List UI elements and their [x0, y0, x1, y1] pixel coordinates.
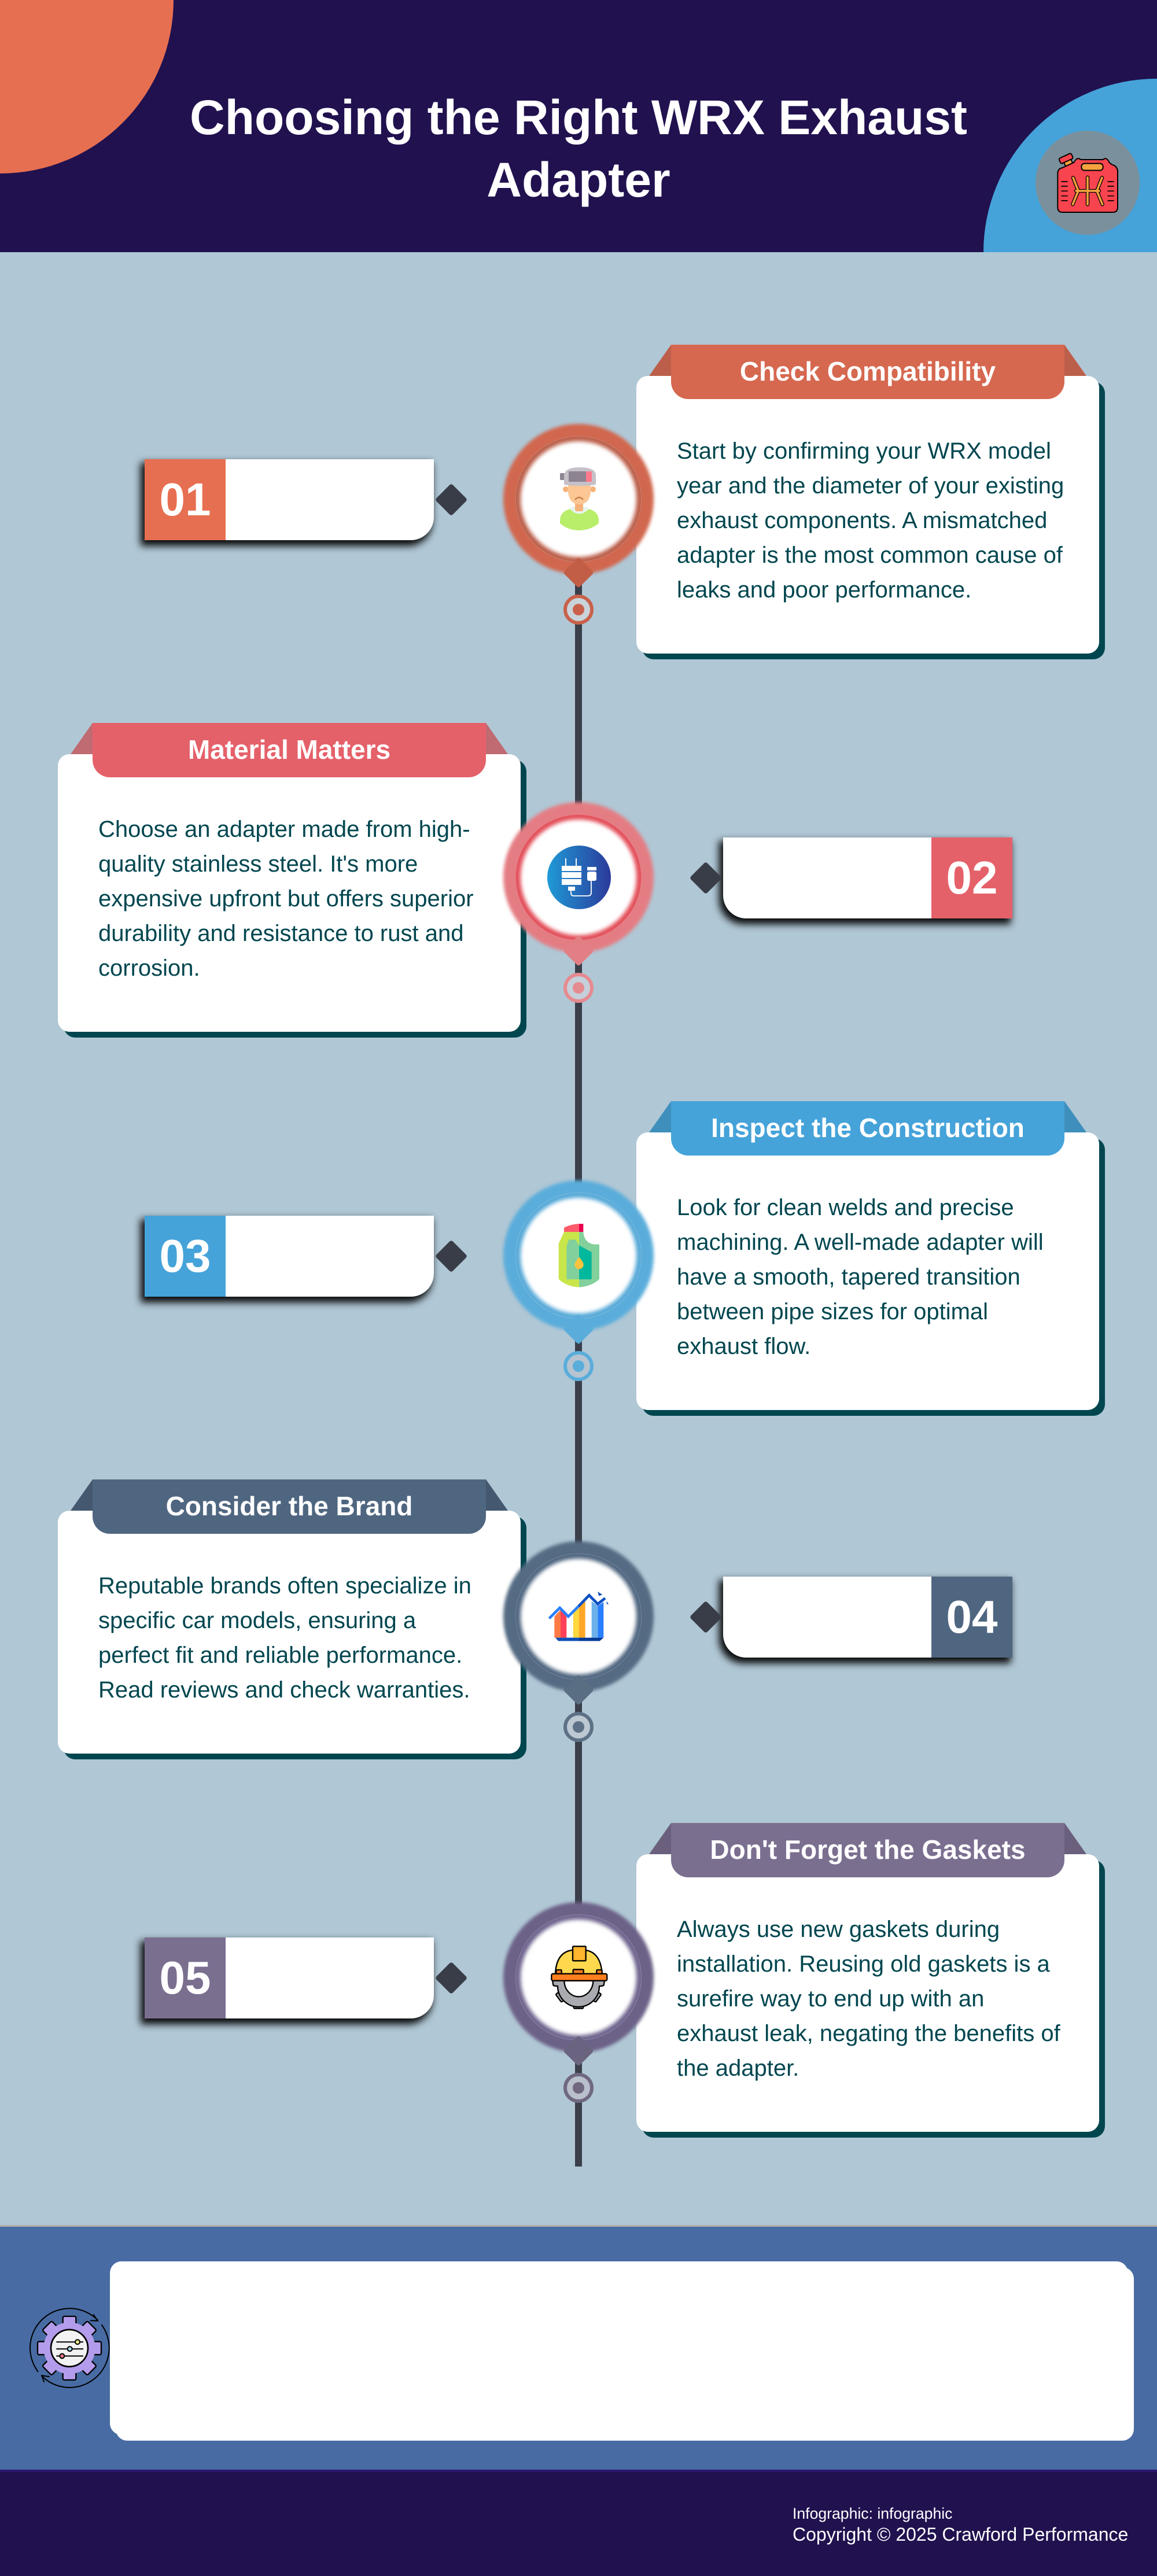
heading ribbon: Consider the Brand	[166, 1491, 412, 1521]
timeline node 1	[501, 421, 656, 625]
inner band	[515, 814, 642, 940]
panel: consider the brand	[58, 1479, 526, 1759]
description text: Read reviews and check warranties.	[98, 1677, 470, 1703]
icon: settings gear	[30, 2308, 110, 2389]
icon: oil bottle	[559, 1224, 599, 1287]
pointer diamond	[563, 935, 594, 966]
description text: installation. Reusing old gaskets is a	[677, 1951, 1050, 1977]
card body	[58, 1511, 521, 1754]
ribbon fold right	[1064, 1823, 1086, 1854]
decorative orange circle	[0, 0, 174, 174]
heading ribbon: Don't Forget the Gaskets	[710, 1835, 1026, 1865]
description text	[677, 1917, 1060, 2081]
source and copyright text	[793, 2505, 1128, 2545]
description text: Choose an adapter made from high-	[98, 817, 470, 842]
inner band	[515, 436, 642, 562]
number badge 01: 01	[160, 474, 211, 525]
panel: check compatibility	[636, 345, 1105, 659]
ribbon fold left	[649, 1101, 671, 1132]
icon: hard hat and gear	[551, 1946, 607, 2009]
number badge 03: 03	[160, 1230, 211, 1282]
card body	[58, 754, 521, 1032]
timeline spine	[575, 499, 582, 2167]
description text: specific car models, ensuring a	[98, 1608, 416, 1633]
panel: don't forget the gaskets	[636, 1823, 1105, 2138]
description text: Start by confirming your WRX model	[677, 438, 1051, 464]
heading ribbon: Check Compatibility	[740, 356, 996, 386]
number badge 01	[145, 459, 434, 540]
connector diamond 05	[435, 1962, 467, 1994]
description text: durability and resistance to rust and	[98, 921, 463, 946]
timeline node 3	[501, 1178, 656, 1381]
pointer diamond	[563, 557, 594, 588]
source and copyright text: Copyright © 2025 Crawford Performance	[793, 2524, 1128, 2545]
footer divider	[0, 2225, 1157, 2227]
summary box	[110, 2261, 1128, 2435]
number badge 03	[145, 1216, 434, 1297]
summary band	[0, 2227, 1157, 2470]
heading ribbon: Material Matters	[188, 735, 390, 765]
description text: year and the diameter of your existing	[677, 473, 1064, 499]
description text	[98, 817, 474, 981]
description text: leaks and poor performance.	[677, 577, 971, 603]
timeline dot	[563, 973, 594, 1003]
ribbon fold left	[71, 723, 93, 754]
description text: Always use new gaskets during	[677, 1917, 1000, 1942]
heading ribbon	[93, 723, 486, 777]
outer ring	[503, 424, 654, 574]
description text: quality stainless steel. It's more	[98, 851, 418, 877]
heading ribbon	[93, 1479, 486, 1534]
description text	[98, 1573, 471, 1703]
description text: the adapter.	[677, 2055, 799, 2081]
title: Adapter	[487, 153, 670, 207]
description text: perfect fit and reliable performance.	[98, 1643, 462, 1668]
description text: exhaust leak, negating the benefits of	[677, 2021, 1060, 2046]
timeline node 2	[501, 799, 656, 1003]
icon badge: grey disc	[1036, 131, 1140, 235]
timeline dot	[563, 595, 594, 625]
description text: Reputable brands often specialize in	[98, 1573, 471, 1599]
decorative blue circle	[983, 79, 1157, 426]
panel: material matters	[58, 723, 526, 1038]
inner band	[515, 1914, 642, 2040]
description text: surefire way to end up with an	[677, 1986, 984, 2012]
pointer diamond	[563, 2035, 594, 2066]
ribbon fold left	[649, 345, 671, 376]
number badge 05	[145, 1937, 434, 2018]
number badge 02: 02	[946, 852, 997, 903]
description text: adapter is the most common cause of	[677, 542, 1063, 568]
description text	[677, 438, 1064, 603]
ribbon fold right	[1064, 1101, 1086, 1132]
description text: between pipe sizes for optimal	[677, 1299, 988, 1324]
title	[190, 90, 967, 207]
inner band	[515, 1193, 642, 1319]
card body	[636, 1854, 1099, 2132]
ribbon fold right	[486, 723, 508, 754]
description text: expensive upfront but offers superior	[98, 886, 474, 911]
heading ribbon	[671, 1101, 1064, 1156]
white centre	[521, 820, 636, 935]
connector diamond 01	[435, 484, 467, 516]
connector diamond 04	[690, 1601, 722, 1633]
description text: machining. A well-made adapter will	[677, 1230, 1044, 1255]
heading ribbon	[671, 345, 1064, 399]
source and copyright text: Infographic: infographic	[793, 2505, 952, 2522]
pointer diamond	[563, 1674, 594, 1706]
white centre	[521, 441, 636, 557]
white centre	[521, 1920, 636, 2035]
panel: inspect the construction	[636, 1101, 1105, 1416]
white centre	[521, 1559, 636, 1674]
description text: exhaust components. A mismatched	[677, 508, 1047, 533]
connector diamond 02	[690, 862, 722, 894]
timeline dot	[563, 1712, 594, 1742]
white centre	[521, 1198, 636, 1313]
description text: have a smooth, tapered transition	[677, 1264, 1020, 1290]
icon: welder	[560, 467, 599, 530]
outer ring	[503, 802, 654, 953]
description text: Look for clean welds and precise	[677, 1195, 1014, 1220]
number badge 05: 05	[160, 1952, 211, 2003]
ribbon fold left	[71, 1479, 93, 1511]
timeline dot	[563, 1351, 594, 1381]
outer ring	[503, 1902, 654, 2053]
timeline dot	[563, 2073, 594, 2103]
card body	[636, 376, 1099, 654]
footer band	[0, 2470, 1157, 2576]
connector diamond 03	[435, 1240, 467, 1272]
ribbon fold left	[649, 1823, 671, 1854]
pointer diamond	[563, 1313, 594, 1345]
timeline node 4	[501, 1540, 656, 1742]
timeline node 5	[501, 1900, 656, 2103]
icon: fuel can	[1057, 153, 1118, 213]
icon: growth chart	[548, 1592, 609, 1641]
description text: exhaust flow.	[677, 1334, 810, 1359]
ribbon fold right	[486, 1479, 508, 1511]
outer ring	[503, 1541, 654, 1692]
number badge 02	[723, 837, 1012, 918]
title: Choosing the Right WRX Exhaust	[190, 90, 967, 145]
card body	[636, 1132, 1099, 1410]
heading ribbon	[671, 1823, 1064, 1877]
icon: plug adapter	[547, 846, 611, 909]
inner band	[515, 1553, 642, 1680]
ribbon fold right	[1064, 345, 1086, 376]
header band	[0, 0, 1157, 252]
number badge 04	[723, 1577, 1012, 1658]
heading ribbon: Inspect the Construction	[711, 1113, 1025, 1143]
description text: corrosion.	[98, 955, 200, 981]
description text	[677, 1195, 1044, 1359]
number badge 04: 04	[946, 1591, 997, 1643]
outer ring	[503, 1180, 654, 1331]
